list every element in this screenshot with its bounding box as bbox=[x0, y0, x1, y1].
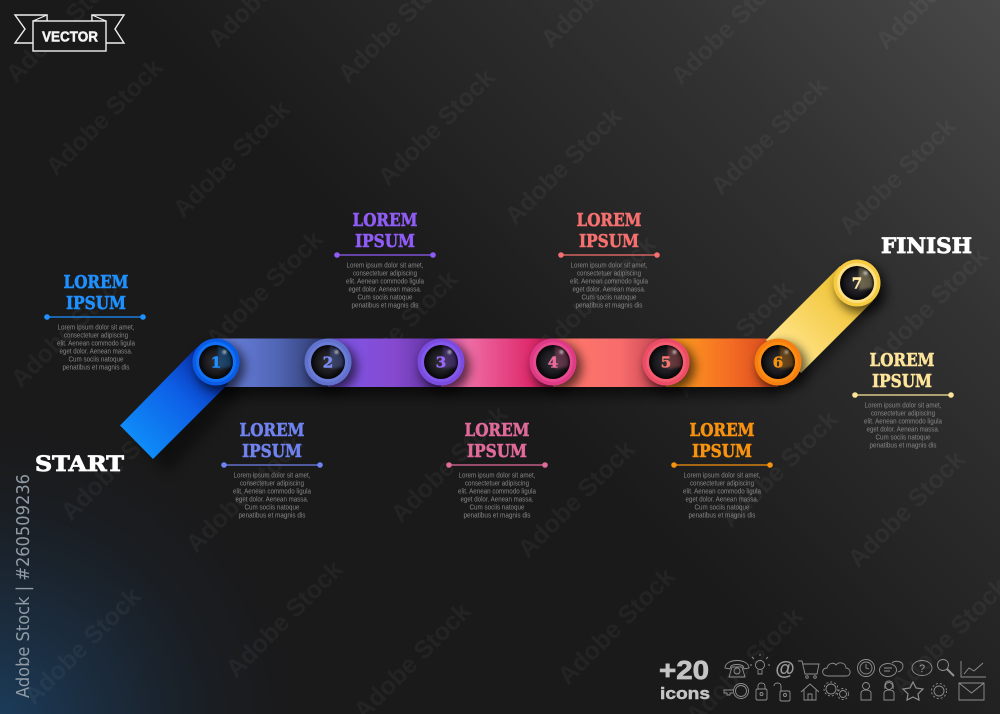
text block 1: Lorem ipsum dolor sit amet, bbox=[58, 322, 134, 332]
icon: at sign: @ bbox=[775, 658, 795, 680]
start ribbon shadow bbox=[135, 360, 240, 473]
step marker 1 bbox=[192, 338, 245, 392]
timeline band bbox=[120, 266, 885, 473]
icon: magnifier bbox=[938, 660, 954, 676]
finish ribbon bbox=[766, 266, 873, 373]
icon: clock bbox=[858, 660, 874, 676]
text block 4 bbox=[446, 420, 548, 520]
text block 5: LOREM bbox=[576, 210, 642, 231]
icon: star badge bbox=[903, 682, 923, 700]
stock watermarks: Adobe Stock bbox=[385, 400, 513, 528]
text block 7: Lorem ipsum dolor sit amet, bbox=[864, 400, 942, 410]
text block 4: LOREM bbox=[464, 420, 530, 441]
stock watermarks: Adobe Stock bbox=[842, 445, 970, 573]
text block 3: Lorem ipsum dolor sit amet, bbox=[346, 260, 424, 270]
band shadow bbox=[216, 348, 778, 396]
step marker 2 bbox=[304, 338, 357, 392]
text block 3: consectetuer adipiscing bbox=[353, 268, 417, 278]
text block 6 bbox=[671, 420, 773, 520]
segment 1 to 2 bbox=[216, 338, 328, 387]
stock watermarks: Adobe Stock bbox=[167, 95, 295, 223]
text block 7: LOREM bbox=[870, 350, 935, 371]
text block 3: elit. Aenean commodo ligula bbox=[346, 276, 425, 286]
stock watermarks: Adobe Stock bbox=[512, 435, 640, 563]
text block 3: IPSUM bbox=[355, 231, 415, 252]
text block 6: Lorem ipsum dolor sit amet, bbox=[684, 470, 760, 480]
step marker 7 bbox=[834, 260, 886, 313]
text block 2 bbox=[221, 420, 323, 520]
stock watermarks: Adobe Stock bbox=[705, 72, 833, 200]
text block 4: consectetuer adipiscing bbox=[465, 478, 529, 488]
segment 2 to 3 bbox=[328, 338, 441, 387]
text block 5: Cum sociis natoque bbox=[582, 292, 636, 302]
text block 6: elit. Aenean commodo ligula bbox=[683, 486, 762, 496]
text block 5: eget dolor. Aenean massa. bbox=[572, 284, 646, 294]
text block 3 bbox=[334, 210, 436, 310]
text block 5 bbox=[558, 210, 660, 310]
text block 3: Cum sociis natoque bbox=[358, 292, 412, 302]
icon: question bubble bbox=[912, 660, 932, 676]
text block 2: LOREM bbox=[240, 420, 305, 441]
icon: key bbox=[724, 684, 748, 698]
text block 6: IPSUM bbox=[692, 441, 752, 462]
text block 6: eget dolor. Aenean massa. bbox=[686, 494, 758, 504]
segment 5 to 6 bbox=[666, 338, 778, 387]
icon: closed padlock bbox=[756, 683, 767, 700]
text block 4: IPSUM bbox=[467, 441, 527, 462]
icon: woman bbox=[884, 681, 894, 700]
text block 6: penatibus et magnis dis bbox=[688, 510, 756, 520]
plus twenty icons caption bbox=[659, 655, 710, 703]
text block 5: Lorem ipsum dolor sit amet, bbox=[570, 260, 648, 270]
text block 4: eget dolor. Aenean massa. bbox=[460, 494, 534, 504]
step marker 4 bbox=[530, 338, 582, 392]
text block 5: penatibus et magnis dis bbox=[576, 300, 643, 310]
text block 6: LOREM bbox=[690, 420, 755, 441]
segment 3 to 4 bbox=[441, 338, 553, 387]
text block 1: elit. Aenean commodo ligula bbox=[57, 338, 136, 348]
text block 1: Cum sociis natoque bbox=[68, 354, 124, 364]
text block 6: Cum sociis natoque bbox=[694, 502, 750, 512]
text block 7 bbox=[852, 350, 954, 450]
text block 2: Cum sociis natoque bbox=[244, 502, 300, 512]
stock watermarks: Adobe Stock bbox=[220, 555, 348, 683]
plus twenty icons caption: +20 bbox=[659, 655, 709, 685]
icon: shopping cart bbox=[798, 661, 819, 678]
text block 2: consectetuer adipiscing bbox=[240, 478, 304, 488]
icon set bbox=[724, 654, 986, 701]
text block 3: penatibus et magnis dis bbox=[352, 300, 419, 310]
vector ribbon badge bbox=[15, 15, 124, 51]
text block 2: Lorem ipsum dolor sit amet, bbox=[234, 470, 310, 480]
icon: house bbox=[801, 684, 819, 700]
icon: telephone bbox=[725, 660, 749, 677]
step marker 6 bbox=[754, 338, 807, 392]
text block 7: IPSUM bbox=[872, 371, 932, 392]
text block 4: elit. Aenean commodo ligula bbox=[458, 486, 537, 496]
text block 2: elit. Aenean commodo ligula bbox=[233, 486, 312, 496]
stock watermarks: Adobe Stock bbox=[499, 102, 627, 230]
stock watermarks: Adobe Stock bbox=[372, 63, 500, 191]
text block 2: eget dolor. Aenean massa. bbox=[236, 494, 308, 504]
text block 1: eget dolor. Aenean massa. bbox=[60, 346, 132, 356]
text block 7: Cum sociis natoque bbox=[876, 432, 930, 442]
text block 1: LOREM bbox=[64, 272, 129, 293]
icon: light bulb bbox=[750, 654, 770, 674]
icon: man bbox=[861, 682, 871, 700]
stock watermarks: Adobe Stock bbox=[180, 430, 308, 558]
icon: envelope bbox=[959, 683, 984, 700]
finish label: FINISH bbox=[881, 233, 972, 258]
text block 2: IPSUM bbox=[242, 441, 302, 462]
text block 7: consectetuer adipiscing bbox=[871, 408, 935, 418]
stock watermarks: Adobe Stock bbox=[670, 275, 798, 403]
step marker 6: 6 bbox=[773, 354, 783, 372]
stock watermarks: Adobe Stock bbox=[200, 225, 328, 353]
step marker 3: 3 bbox=[436, 354, 446, 372]
text block 1: penatibus et magnis dis bbox=[62, 362, 130, 372]
stock watermarks: Adobe Stock bbox=[552, 562, 680, 690]
text block 4: Cum sociis natoque bbox=[470, 502, 524, 512]
start ribbon bbox=[120, 347, 228, 459]
step marker 7: 7 bbox=[852, 274, 862, 292]
stock watermarks: Adobe Stock bbox=[18, 582, 146, 710]
stock watermarks: Adobe Stock bbox=[335, 265, 463, 393]
text block 4: penatibus et magnis dis bbox=[464, 510, 531, 520]
stock watermarks: Adobe Stock bbox=[715, 405, 843, 533]
vector ribbon badge: VECTOR bbox=[42, 30, 98, 46]
icon: question bubble: ? bbox=[919, 663, 925, 675]
step marker 5 bbox=[642, 338, 695, 392]
start label: START bbox=[35, 451, 124, 476]
stock watermarks: Adobe Stock bbox=[833, 112, 961, 240]
step marker 1: 1 bbox=[211, 354, 221, 372]
step marker 2: 2 bbox=[323, 354, 333, 372]
icon: gears bbox=[824, 682, 848, 700]
segment 4 to 5 bbox=[553, 338, 666, 387]
icon: percent badge bbox=[932, 684, 946, 698]
stock watermarks: Adobe Stock bbox=[5, 265, 133, 393]
text block 5: elit. Aenean commodo ligula bbox=[570, 276, 649, 286]
text block 5: consectetuer adipiscing bbox=[577, 268, 641, 278]
finish ribbon shadow bbox=[780, 270, 885, 385]
stock watermarks: Adobe Stock bbox=[40, 53, 168, 181]
text block 7: eget dolor. Aenean massa. bbox=[866, 424, 940, 434]
text block 5: IPSUM bbox=[579, 231, 639, 252]
text block 7: elit. Aenean commodo ligula bbox=[864, 416, 943, 426]
stock watermarks: Adobe Stock bbox=[865, 242, 993, 370]
step marker 3 bbox=[418, 338, 470, 392]
text block 1: consectetuer adipiscing bbox=[64, 330, 128, 340]
stock watermarks: Adobe Stock bbox=[55, 398, 183, 526]
text block 4: Lorem ipsum dolor sit amet, bbox=[458, 470, 536, 480]
icon: speech bubbles bbox=[880, 661, 903, 676]
icon: line chart bbox=[961, 661, 986, 677]
stock watermarks: Adobe Stock bbox=[533, 230, 661, 358]
icon: cloud bbox=[823, 663, 850, 676]
plus twenty icons caption: icons bbox=[660, 684, 710, 703]
text block 2: penatibus et magnis dis bbox=[238, 510, 306, 520]
text block 3: eget dolor. Aenean massa. bbox=[348, 284, 422, 294]
step marker 5: 5 bbox=[661, 354, 671, 372]
text block 1 bbox=[44, 272, 146, 372]
text block 1: IPSUM bbox=[66, 293, 126, 314]
text block 6: consectetuer adipiscing bbox=[690, 478, 754, 488]
step marker 4: 4 bbox=[548, 354, 558, 372]
text block 7: penatibus et magnis dis bbox=[870, 440, 937, 450]
text block 3: LOREM bbox=[352, 210, 418, 231]
icon: open padlock bbox=[774, 683, 790, 701]
vertical stock id: Adobe Stock | #260509236 bbox=[14, 474, 34, 698]
